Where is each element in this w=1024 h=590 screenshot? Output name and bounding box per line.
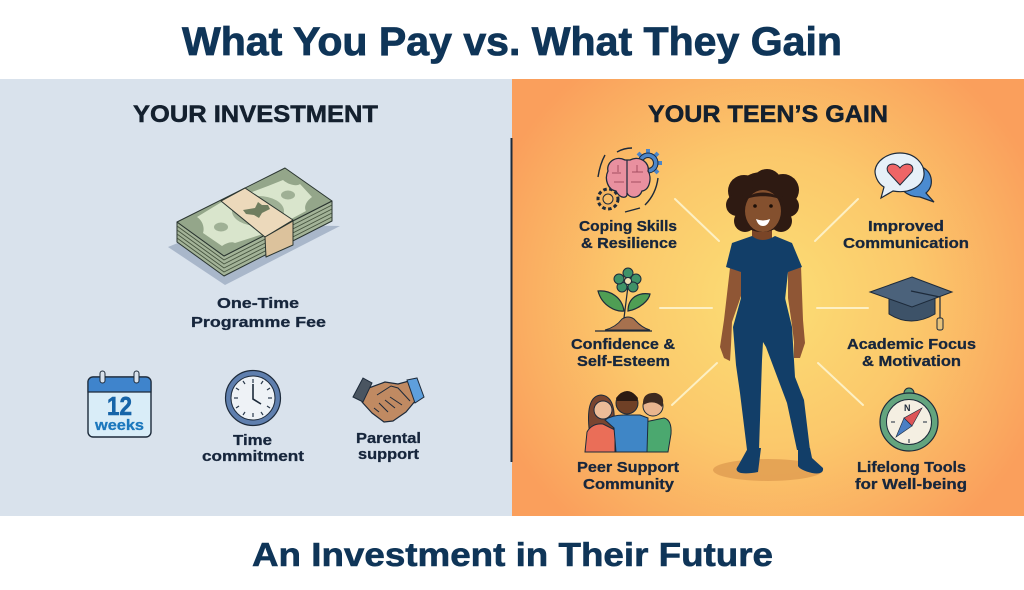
pants	[733, 298, 810, 450]
figure: smiling teen	[713, 169, 823, 481]
icon: group of three peers	[585, 391, 671, 452]
title: What You Pay vs. What They Gain	[182, 20, 842, 64]
label: academic focus & motivation: Academic Focus	[847, 336, 976, 353]
arms	[720, 268, 742, 361]
label: one-time programme fee: Programme Fee	[191, 314, 326, 331]
icon: calendar 12 weeks	[88, 371, 151, 437]
shirt	[726, 236, 802, 325]
label: lifelong tools for well-being: for Well-being	[855, 476, 967, 493]
icon: speech bubbles with heart	[875, 153, 934, 202]
label: peer support community: Peer Support	[577, 459, 679, 476]
icon: flower sprout	[595, 268, 652, 331]
label: improved communication: Communication	[843, 235, 969, 252]
label: parental support: Parental	[356, 430, 421, 447]
label: peer support community: Community	[583, 476, 675, 493]
shoes	[737, 448, 761, 473]
label: coping skills & resilience: Coping Skills	[579, 218, 677, 235]
label: academic focus & motivation	[847, 336, 976, 370]
icon: graduation cap	[870, 277, 952, 330]
face	[745, 190, 781, 232]
label: confidence & self-esteem: Confidence &	[571, 336, 675, 353]
label: time commitment: commitment	[202, 448, 304, 465]
panel: your investment	[0, 79, 512, 516]
center divider	[510, 138, 512, 462]
radiating lines	[660, 199, 868, 405]
icon: calendar 12 weeks: 12	[107, 391, 132, 421]
label: peer support community	[577, 459, 679, 493]
heading: your teen's gain: YOUR TEEN’S GAIN	[648, 101, 888, 128]
label: lifelong tools for well-being: Lifelong Tools	[857, 459, 966, 476]
label: parental support	[356, 430, 421, 463]
label: confidence & self-esteem	[571, 336, 675, 370]
icon: stack of money	[168, 168, 340, 285]
hair	[726, 169, 799, 232]
icon: compass: N	[904, 403, 910, 413]
heading: your investment: YOUR INVESTMENT	[133, 101, 378, 128]
footer tagline: An Investment in Their Future	[252, 536, 773, 573]
label: one-time programme fee: One-Time	[217, 295, 299, 312]
label: confidence & self-esteem: Self-Esteem	[577, 353, 670, 370]
label: lifelong tools for well-being	[855, 459, 967, 493]
label: academic focus & motivation: & Motivation	[862, 353, 961, 370]
label: time commitment: Time	[233, 432, 272, 449]
label: improved communication: Improved	[868, 218, 944, 235]
icon: compass	[880, 388, 938, 451]
label: coping skills & resilience: & Resilience	[581, 235, 677, 252]
panel: your teen's gain	[512, 79, 1024, 516]
label: improved communication	[843, 218, 969, 252]
label: one-time programme fee	[191, 295, 326, 331]
icon: brain with gears	[598, 148, 662, 212]
label: coping skills & resilience	[579, 218, 677, 252]
icon: handshake	[353, 378, 424, 422]
label: parental support: support	[358, 446, 419, 463]
icon: calendar 12 weeks: weeks	[94, 417, 144, 434]
icon: clock	[226, 370, 280, 426]
label: time commitment	[202, 432, 304, 465]
